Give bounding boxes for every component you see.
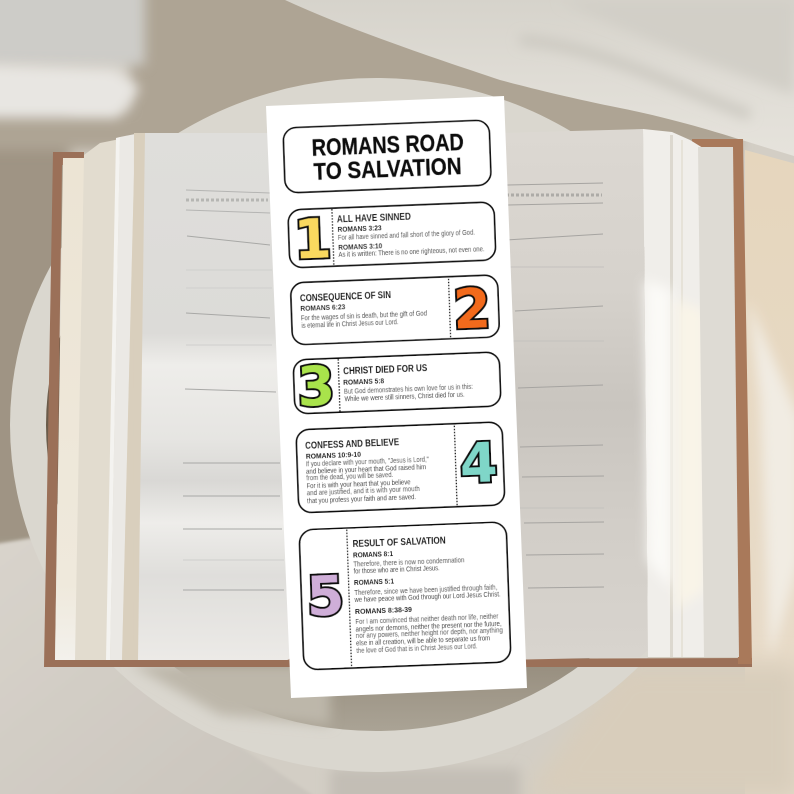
verse: If you declare with your mouth, "Jesus is Lord," [306, 457, 429, 468]
verse: and are justified, and it is with your mouth [307, 486, 420, 498]
number 2: 2 [452, 277, 492, 342]
verses: ROMANS 8:38-39 [355, 605, 412, 616]
panel 4: confess and believe [296, 422, 505, 513]
card contents [283, 120, 511, 670]
verse: is eternal life in Christ Jesus our Lord. [301, 319, 399, 330]
verses: ROMANS 3:23 [337, 223, 382, 234]
number 5: 5 [306, 564, 345, 628]
title [311, 129, 465, 186]
number 5: 5 [307, 565, 347, 629]
verses: nor any powers, neither height nor depth, nor anything [356, 628, 503, 640]
verse: ROMANS 10:9-10 [306, 450, 361, 461]
verses: angels nor demons, neither the present nor the future, [356, 621, 502, 634]
verses: ROMANS 8:1 [353, 549, 393, 560]
bookmark card [266, 96, 527, 698]
verse: that you profess your faith and are saved. [307, 494, 416, 505]
heading: RESULT OF SALVATION [352, 536, 446, 550]
verses: As it is written: There is no one righteous, not even one. [338, 246, 485, 259]
verse [343, 373, 473, 403]
heading: ALL HAVE SINNED [337, 212, 411, 226]
verse: But God demonstrates his own love for us in this: [344, 384, 473, 396]
panel 3: christ died for us [293, 348, 501, 420]
title panel [283, 120, 491, 193]
left book pages [55, 133, 290, 660]
verses: Therefore, since we have been justified through faith, [354, 584, 498, 597]
number 3: 3 [296, 354, 336, 419]
panel 1: all have sinned [288, 201, 496, 273]
number 1: 1 [293, 207, 333, 272]
heading: CONFESS AND BELIEVE [305, 437, 400, 452]
number 4: 4 [459, 431, 499, 496]
verses: For I am convinced that neither death nor life, neither [355, 613, 499, 626]
right book pages [500, 129, 739, 660]
verse: ROMANS 5:8 [343, 376, 384, 387]
verses: ROMANS 5:1 [354, 576, 394, 587]
verse: ROMANS 6:23 [300, 302, 345, 313]
verse [305, 447, 431, 505]
panel 2: consequence of sin [290, 275, 500, 349]
verses [352, 545, 504, 655]
verses: else in all creation, will be able to separate us from [356, 635, 490, 648]
verses: ROMANS 3:10 [338, 241, 382, 252]
verse: For the wages of sin is death, but the gift of God [301, 310, 427, 322]
verses: For all have sinned and fall short of the glory of God. [338, 230, 475, 242]
verses: Therefore, there is now no condemnation [353, 557, 465, 569]
panel 5: result of salvation [299, 522, 511, 670]
top-right cloth [285, 0, 794, 156]
title: ROMANS ROAD [311, 129, 464, 162]
number 1: 1 [294, 208, 334, 273]
number 2: 2 [453, 278, 493, 343]
verse [300, 299, 427, 330]
heading: CHRIST DIED FOR US [343, 363, 428, 377]
title: TO SALVATION [313, 153, 462, 186]
number 4: 4 [460, 432, 500, 497]
verses [337, 219, 485, 259]
verse: from the dead, you will be saved. [306, 472, 393, 483]
verse: While we were still sinners, Christ died for us. [344, 392, 465, 403]
verse: For it is with your heart that you believe [306, 479, 411, 490]
verse: and believe in your heart that God raised him [306, 464, 426, 476]
verses: we have peace with God through our Lord Jesus Christ. [354, 592, 501, 604]
book cover [44, 139, 752, 667]
white card [266, 96, 527, 698]
heading: CONSEQUENCE OF SIN [300, 290, 391, 304]
number 3: 3 [297, 355, 337, 420]
verses: the love of God that is in Christ Jesus our Lord. [356, 643, 478, 655]
verses: for those who are in Christ Jesus. [353, 565, 440, 576]
